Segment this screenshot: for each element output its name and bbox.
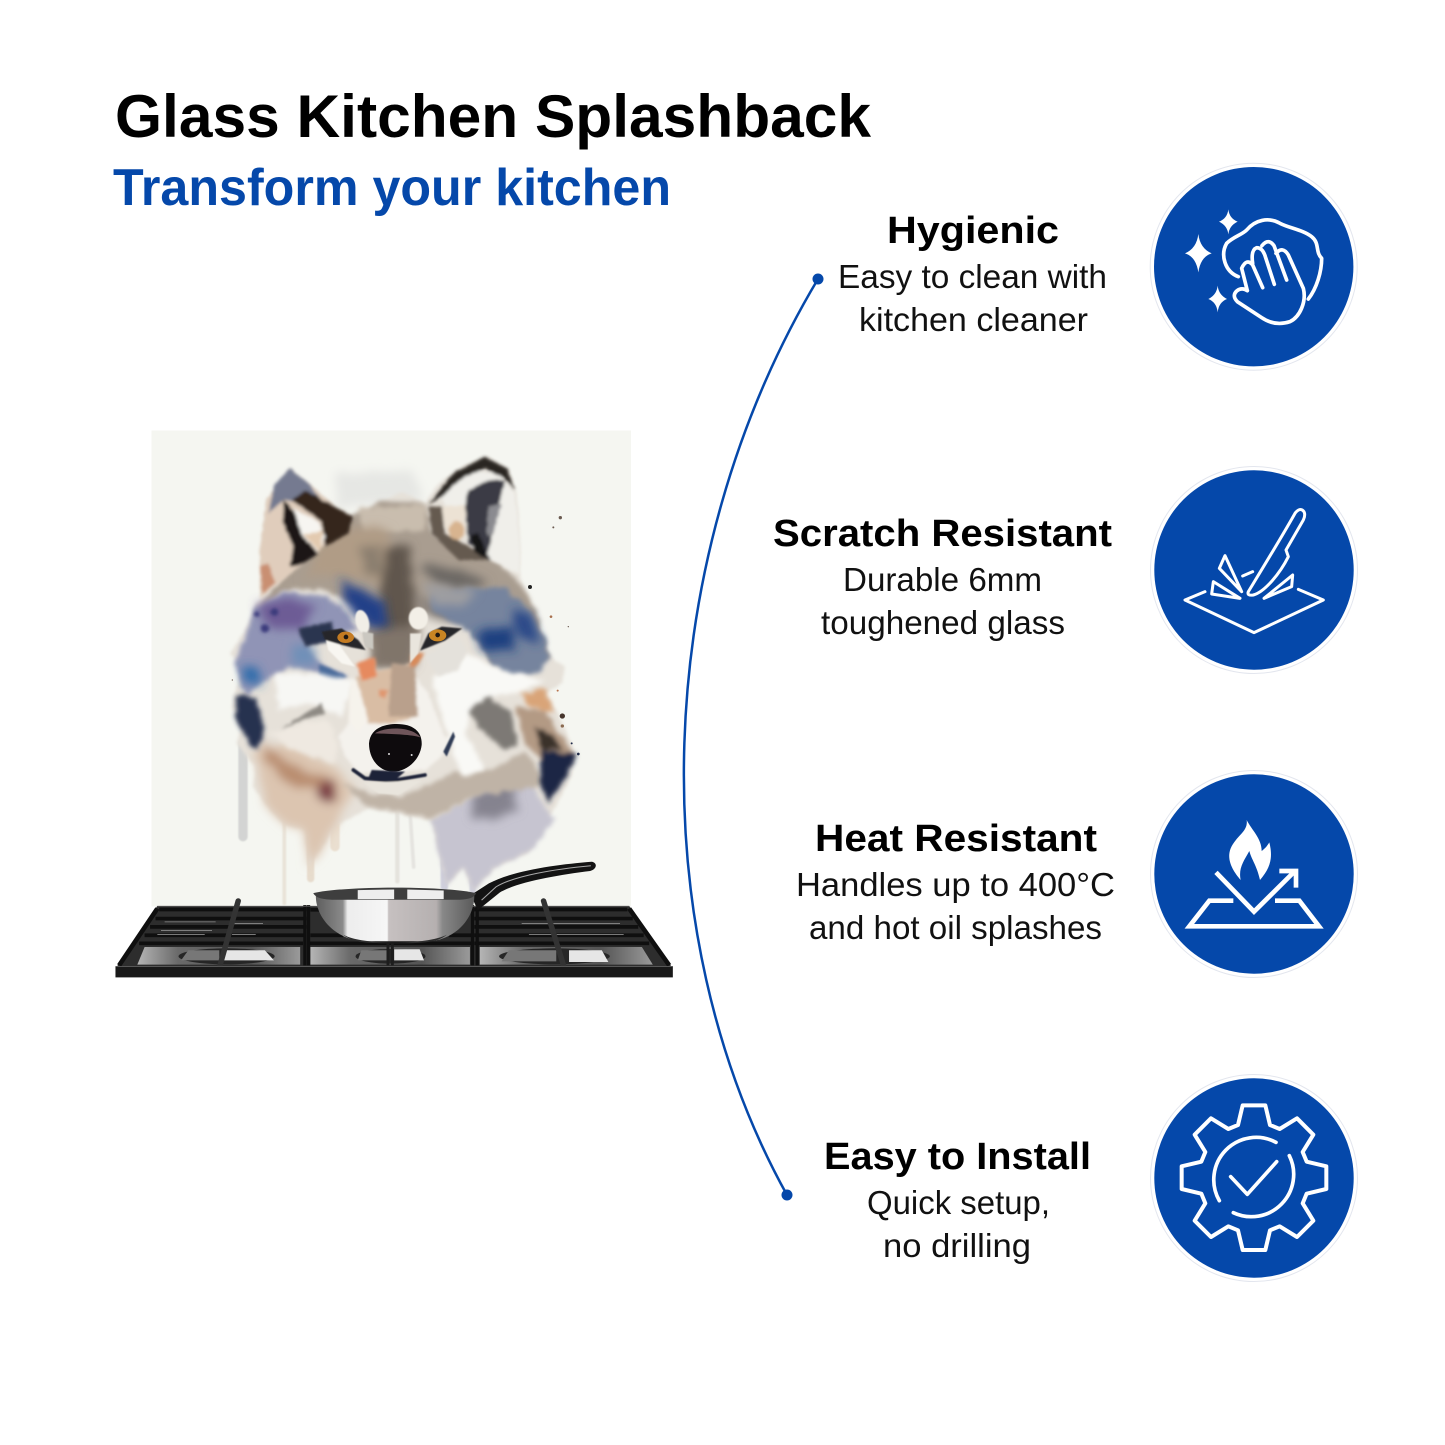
frying pan <box>313 862 596 943</box>
description: hygienic <box>838 258 1107 338</box>
description: scratch resistant <box>821 561 1065 641</box>
lavender lower right <box>432 770 555 890</box>
white cheeks <box>268 653 545 777</box>
icon: flame over surface with arrow <box>1150 770 1358 978</box>
description: easy to install <box>867 1184 1050 1264</box>
heading: easy to install: Easy to Install <box>824 1136 1091 1178</box>
burners <box>178 948 610 964</box>
splashback panel <box>152 430 631 906</box>
heading: scratch resistant: Scratch Resistant <box>773 513 1112 555</box>
feature: heat resistant <box>796 770 1358 978</box>
title: Glass Kitchen Splashback <box>115 83 872 150</box>
lower left tan fur <box>255 743 352 867</box>
connector curve with end dots <box>684 274 824 1200</box>
description: hygienic: Easy to clean with <box>838 258 1107 295</box>
description: easy to install: Quick setup, <box>867 1184 1050 1221</box>
feature: easy to install <box>824 1074 1358 1282</box>
heading: hygienic: Hygienic <box>887 210 1059 252</box>
wolf mouth <box>353 732 455 795</box>
feature: scratch resistant <box>773 466 1358 674</box>
neck <box>342 750 545 818</box>
wolf splatter <box>232 516 580 755</box>
icon: knife on glass surface <box>1150 466 1358 674</box>
paint drips <box>243 743 473 903</box>
product image: wolf splashback above hob <box>115 430 673 977</box>
wolf watercolour <box>230 457 580 903</box>
feature: hygienic <box>838 163 1357 370</box>
head base <box>230 457 575 890</box>
description: easy to install: no drilling <box>883 1227 1031 1264</box>
description: scratch resistant: Durable 6mm <box>843 561 1042 598</box>
icon: hand wiping with sparkles <box>1150 163 1357 370</box>
burner windows <box>137 947 653 965</box>
pan supports <box>220 901 564 965</box>
pan handle <box>471 862 596 910</box>
description: heat resistant <box>796 866 1115 946</box>
gas hob <box>115 862 673 977</box>
wolf eyes <box>337 629 446 643</box>
right ear <box>428 457 520 575</box>
dark left ruff <box>235 697 265 750</box>
description: heat resistant: and hot oil splashes <box>809 909 1102 946</box>
eye surrounds <box>322 607 462 667</box>
subtitle: Transform your kitchen <box>113 159 671 217</box>
blue left <box>235 592 358 697</box>
description: scratch resistant: toughened glass <box>821 604 1065 641</box>
blue right <box>432 587 550 677</box>
description: heat resistant: Handles up to 400°C <box>796 866 1115 903</box>
left ear <box>260 468 353 598</box>
hob body <box>117 906 671 966</box>
hob front edge <box>115 966 673 977</box>
description: hygienic: kitchen cleaner <box>859 301 1088 338</box>
heading: heat resistant: Heat Resistant <box>815 818 1097 860</box>
forehead fur <box>258 500 550 677</box>
wolf nose <box>369 724 422 772</box>
hob grates <box>119 905 669 965</box>
lower right fur <box>468 690 577 803</box>
icon: gear with check mark <box>1150 1074 1358 1282</box>
pan rim <box>313 888 476 900</box>
pan body <box>316 896 474 941</box>
muzzle <box>338 653 455 773</box>
